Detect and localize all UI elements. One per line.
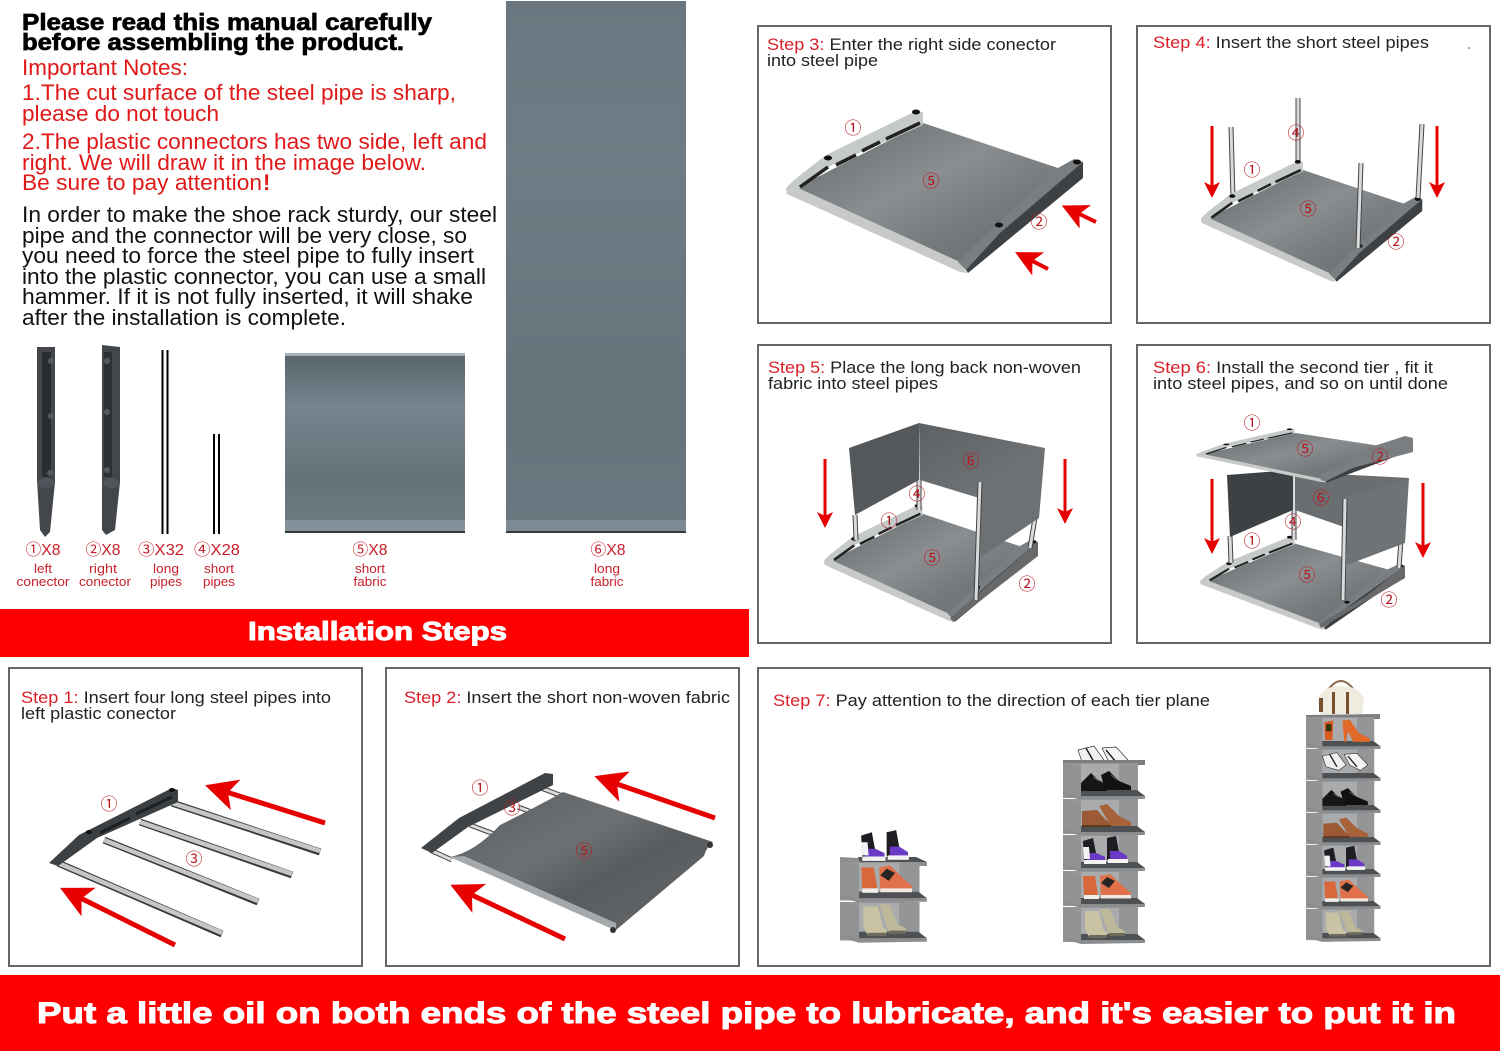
parts quantity captions: long — [153, 561, 179, 576]
parts quantity captions: short — [204, 561, 234, 576]
step 4 text: Step 4: Insert the short steel pipes — [1153, 33, 1429, 52]
step 3 part numbers: ② — [1030, 213, 1048, 232]
parts quantity captions: pipes — [150, 574, 183, 589]
installation advice paragraph: you need to force the steel pipe to fully insert — [22, 243, 474, 268]
parts quantity captions: ①X8 — [26, 541, 61, 559]
step 6 text: into steel pipes, and so on until done — [1153, 374, 1448, 393]
parts quantity captions: conector — [79, 574, 132, 589]
parts quantity captions: conector — [16, 574, 70, 589]
step 4 part numbers: ① — [1244, 161, 1260, 180]
step 3 tray — [786, 110, 1083, 273]
step 6 lower connector lighter side — [1319, 565, 1405, 628]
step 3 text: Step 3: Enter the right side conector — [767, 35, 1056, 54]
step 6 part numbers: ① — [1244, 414, 1260, 433]
step 2 text: Step 2: Insert the short non-woven fabric — [404, 688, 731, 707]
step 2 part numbers: ⑤ — [576, 842, 592, 861]
stray dot — [1468, 47, 1470, 49]
heading: read manual — [22, 9, 432, 55]
panel: step 6 — [1137, 345, 1490, 643]
step 3 arrows — [1032, 214, 1096, 269]
step 1 part numbers — [100, 795, 202, 869]
installation advice paragraph: into the plastic connector, you can use a small — [22, 264, 486, 289]
step 2 left connector — [421, 773, 553, 853]
step 6 front pipe — [1343, 499, 1345, 600]
step 5 part numbers: ④ — [908, 485, 926, 504]
step 5 pipes — [855, 443, 1035, 548]
step 5 tray — [824, 504, 1038, 622]
panel: step 4 — [1137, 26, 1490, 323]
step 1 part numbers: ③ — [186, 850, 202, 869]
step 5 text: fabric into steel pipes — [768, 374, 938, 393]
step 4 arrows — [1212, 126, 1437, 186]
step 1 text — [21, 688, 331, 723]
step 3 text: into steel pipe — [767, 51, 878, 70]
panel: step 5 — [758, 345, 1111, 643]
installation advice paragraph: after the installation is complete. — [22, 305, 346, 330]
step 5 part numbers: ① — [880, 512, 898, 531]
step 2 part numbers: ③ — [504, 799, 520, 818]
important notes — [22, 55, 487, 195]
parts quantity captions: fabric — [590, 574, 624, 589]
parts quantity captions — [16, 541, 626, 589]
step 5 arrows — [825, 459, 1065, 516]
step 4 part numbers: ④ — [1288, 124, 1304, 143]
step 1 arrows — [82, 792, 325, 945]
step 5 fabric walls — [849, 423, 1045, 557]
step 4 tray — [1201, 160, 1422, 282]
important notes: please do not touch — [22, 101, 219, 126]
step 4 part numbers — [1244, 124, 1404, 252]
step 2 pipe stubs — [430, 788, 565, 860]
rack: 8 tier with bag — [1306, 681, 1381, 942]
parts quantity captions: right — [89, 561, 117, 576]
installation advice paragraph: In order to make the shoe rack sturdy, our steel — [22, 202, 497, 227]
banner: installation steps: Installation Steps — [248, 616, 507, 646]
step 5 front pipe — [976, 482, 980, 600]
step 6 part numbers: ② — [1372, 448, 1388, 467]
heading: read manual: before assembling the product. — [22, 29, 404, 55]
important notes: 1.The cut surface of the steel pipe is sharp, — [22, 80, 456, 105]
parts quantity captions: pipes — [203, 574, 236, 589]
step 1 pipes — [58, 803, 320, 934]
step 6 upper right connector — [1318, 436, 1413, 481]
installation advice paragraph: hammer. If it is not fully inserted, it will shake — [22, 284, 473, 309]
step 4 rear pipes — [1231, 98, 1298, 198]
step 2 fabric front fold — [450, 856, 616, 931]
step 6 part numbers: ⑥ — [1312, 489, 1330, 508]
step 6 fabric walls — [1227, 470, 1409, 565]
important notes: Be sure to pay attention — [22, 170, 262, 195]
step 6 part numbers: ⑤ — [1296, 440, 1314, 459]
step 6 part numbers: ① — [1244, 532, 1260, 551]
step 6 lower tray — [1200, 536, 1405, 630]
step 5 text: Step 5: Place the long back non-woven — [768, 358, 1081, 377]
banner: installation steps — [0, 609, 749, 657]
parts quantity captions: left — [34, 561, 52, 576]
step 1 text: left plastic conector — [21, 704, 176, 723]
parts quantity captions: ④X28 — [194, 541, 240, 559]
parts quantity captions: ⑤X8 — [352, 541, 388, 559]
step 6 text — [1153, 358, 1448, 393]
step 5 part numbers: ⑥ — [962, 452, 980, 471]
step 2 part numbers: ① — [472, 779, 488, 798]
step 6 upper tray — [1196, 428, 1410, 482]
step 2 fabric — [450, 792, 713, 930]
step 1 part numbers: ① — [100, 795, 118, 814]
parts quantity captions: short — [355, 561, 385, 576]
step 1 text: Step 1: Insert four long steel pipes into — [21, 688, 331, 707]
part: short fabric — [285, 353, 465, 533]
step 6 part numbers — [1244, 414, 1398, 610]
part: long pipes — [162, 350, 168, 534]
step 6 pipes — [1230, 470, 1401, 568]
part: short pipes — [213, 434, 220, 534]
step 6 part numbers: ⑤ — [1298, 566, 1316, 585]
step 4 part numbers: ⑤ — [1300, 200, 1316, 219]
step 3 text — [767, 35, 1056, 70]
step 5 part numbers: ② — [1018, 575, 1036, 594]
step 2 arrows — [472, 784, 715, 939]
part: long fabric — [506, 1, 686, 533]
part: right connector — [102, 345, 120, 535]
step 6 part numbers: ④ — [1284, 513, 1302, 532]
step 5 text — [768, 358, 1081, 393]
step 6 part numbers: ② — [1380, 591, 1398, 610]
rack: 3 tier — [840, 830, 927, 943]
important notes: right. We will draw it in the image below. — [22, 150, 426, 175]
heading: read manual: Please read this manual carefully — [22, 9, 432, 35]
parts quantity captions: ⑥X8 — [590, 541, 626, 559]
rack: 6 tier — [1063, 746, 1145, 944]
panel: step 7 — [758, 668, 1490, 966]
banner: lubrication tip: Put a little oil on both ends of the steel pipe to lubricate, and it's easier to put it in — [37, 997, 1456, 1030]
step 4 part numbers: ② — [1388, 233, 1404, 252]
parts quantity captions: ②X8 — [86, 541, 121, 559]
step 5 right connector lighter side — [950, 542, 1038, 622]
part: left connector — [37, 347, 55, 537]
parts quantity captions: long — [594, 561, 620, 576]
important notes: Important Notes: — [22, 55, 188, 80]
step 6 arrows — [1212, 479, 1423, 546]
installation advice paragraph: pipe and the connector will be very close, so — [22, 223, 467, 248]
parts quantity captions: fabric — [354, 574, 387, 589]
bag on top — [1318, 681, 1364, 714]
panel: step 2 — [386, 668, 739, 966]
step 5 part numbers: ⑤ — [924, 549, 940, 568]
step 5 part numbers — [880, 452, 1036, 594]
step 2 part numbers — [472, 779, 592, 861]
panel: step 1 — [9, 668, 362, 966]
step 7 text: Step 7: Pay attention to the direction of each tier plane — [773, 691, 1210, 710]
step 3 part numbers: ⑤ — [922, 172, 940, 191]
step 6 text: Step 6: Install the second tier , fit it — [1153, 358, 1433, 377]
parts quantity captions: ③X32 — [138, 541, 184, 559]
installation advice paragraph — [22, 202, 497, 330]
step 2 fabric end caps — [610, 842, 713, 933]
banner: lubrication tip — [0, 975, 1500, 1051]
panel: step 3 — [758, 26, 1111, 323]
step 1 left connector — [49, 788, 178, 866]
important notes: 2.The plastic connectors has two side, left and — [22, 129, 487, 154]
step 3 part numbers — [844, 119, 1048, 232]
important notes: ! — [263, 170, 270, 195]
step 3 part numbers: ① — [844, 119, 862, 138]
step 4 front pipes — [1358, 124, 1422, 248]
